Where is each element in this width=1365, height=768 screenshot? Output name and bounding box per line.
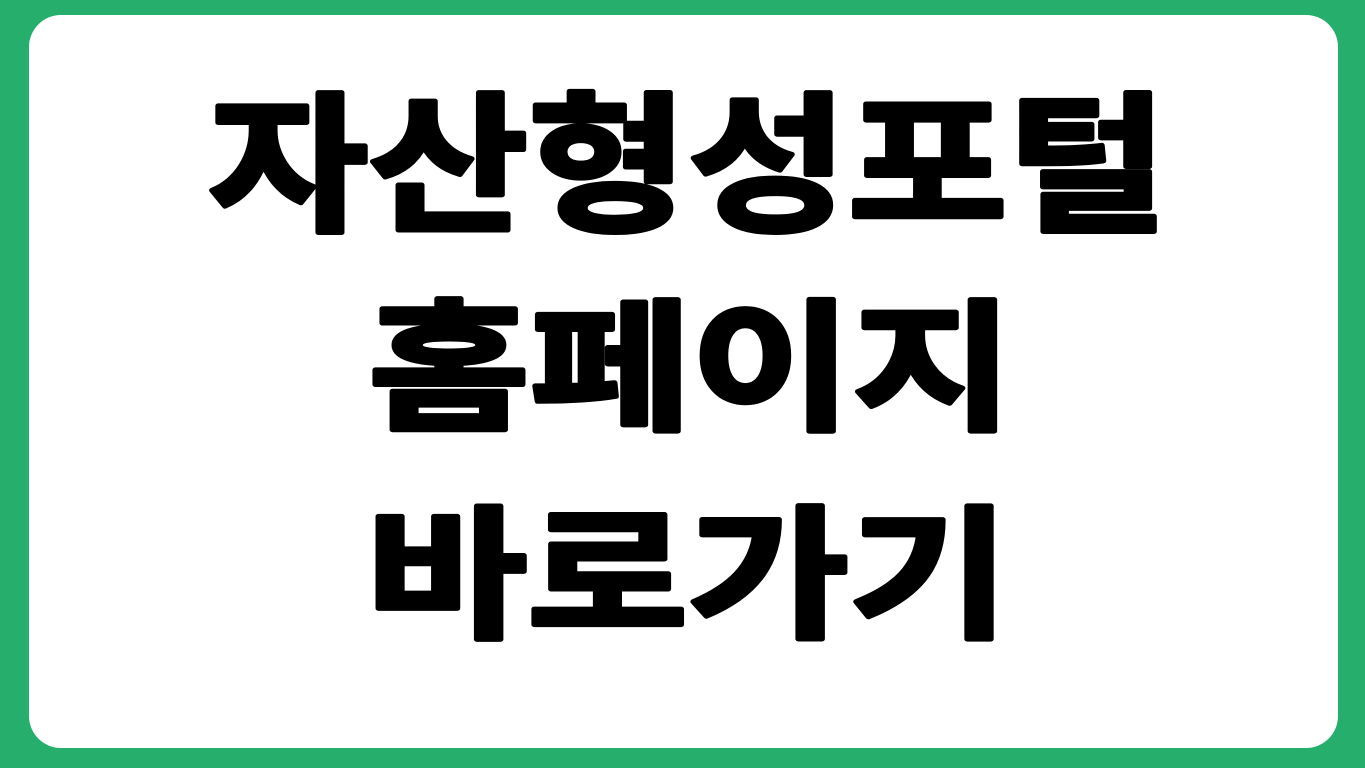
title line 2: 홈페이지 [368,290,1014,450]
title line 1: 자산형성포털 [208,82,1168,251]
title line 3: 바로가기 [366,496,1010,658]
